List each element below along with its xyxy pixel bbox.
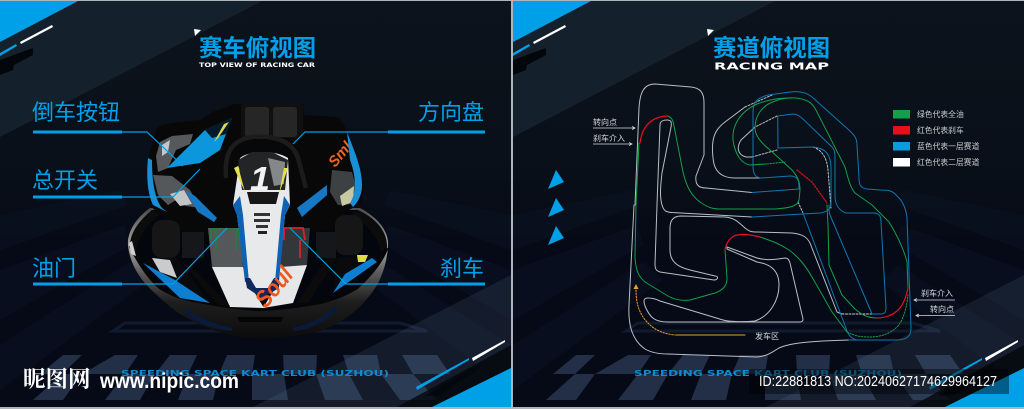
label: start area: 发车区	[755, 331, 779, 341]
callout: throttle	[32, 228, 227, 286]
white track: second level	[629, 84, 872, 357]
callout: steering wheel: 方向盘	[418, 100, 484, 125]
label: turning point, top: 转向点	[593, 117, 617, 127]
watermark logo: 昵图网	[23, 362, 91, 394]
right camouflage and stripe	[330, 170, 357, 205]
title: racing map: RACING MAP	[714, 62, 829, 72]
blue track: first level	[752, 92, 911, 340]
panel: racing map background	[513, 1, 1024, 407]
callout: master switch: 总开关	[32, 168, 98, 193]
track map	[629, 84, 911, 357]
right fender	[297, 258, 337, 303]
title: racing car: TOP VIEW OF RACING CAR	[199, 62, 315, 69]
left fender	[143, 258, 210, 303]
label: turning point, bottom	[916, 304, 955, 317]
title: racing car	[194, 29, 316, 69]
callout: reverse button	[32, 100, 183, 166]
club name: SPEEDING SPACE KART CLUB (SUZHOU)	[121, 369, 389, 378]
steering wheel	[226, 137, 306, 188]
label: turning point, top	[593, 117, 635, 130]
panel: racing car background	[0, 1, 511, 407]
left blue panel	[167, 118, 232, 168]
callout: throttle: 油门	[32, 256, 76, 281]
green: full throttle	[635, 98, 908, 337]
title: racing map	[707, 29, 830, 72]
club name: SPEEDING SPACE KART CLUB (SUZHOU)	[634, 369, 902, 378]
label: turning point, bottom: 转向点	[930, 304, 954, 314]
legend: 红色代表刹车	[917, 125, 964, 135]
callout: master switch	[32, 168, 200, 198]
wheels and hubs	[182, 232, 204, 258]
ring interior	[130, 210, 387, 310]
panel: racing map	[548, 29, 1009, 394]
seat	[241, 104, 303, 138]
nose	[233, 152, 290, 298]
legend: 蓝色代表一层赛道	[917, 141, 980, 151]
callout: brake	[290, 228, 485, 286]
callout: reverse button: 倒车按钮	[32, 100, 120, 125]
watermark logo: www.nipic.com	[99, 370, 239, 393]
label: brake entry, top	[593, 133, 632, 146]
orange lower sponsor mark: Soul	[250, 261, 300, 313]
legend: 绿色代表全油	[917, 109, 964, 119]
red: braking	[640, 116, 908, 318]
bumper slots	[185, 308, 232, 331]
legend: 红色代表二层赛道	[917, 157, 980, 167]
label: brake entry, bottom: 刹车介入	[921, 288, 953, 298]
left pod details	[156, 134, 193, 172]
label: brake entry, bottom	[914, 288, 955, 302]
icon: blue triangles	[548, 170, 564, 245]
left outer stripe and camouflage	[147, 158, 167, 212]
title: racing car: 赛车俯视图	[199, 34, 316, 61]
watermark logo	[23, 362, 239, 394]
label: brake entry, top: 刹车介入	[593, 133, 625, 143]
orange: start area	[634, 284, 745, 335]
bumper ring	[128, 208, 388, 338]
title: racing map: 赛道俯视图	[713, 34, 830, 61]
panel: top view of racing car	[23, 29, 485, 394]
pedals	[210, 229, 240, 250]
callout: steering wheel	[293, 100, 485, 144]
legend	[893, 109, 980, 167]
callout: brake: 刹车	[440, 256, 484, 281]
kart number: 1	[250, 160, 270, 197]
floor panels	[208, 228, 243, 267]
kart illustration	[128, 104, 388, 338]
watermark id strip	[749, 369, 1009, 394]
right pod: orange mark: Sml	[325, 138, 356, 171]
rear seat and pods body	[147, 104, 363, 236]
